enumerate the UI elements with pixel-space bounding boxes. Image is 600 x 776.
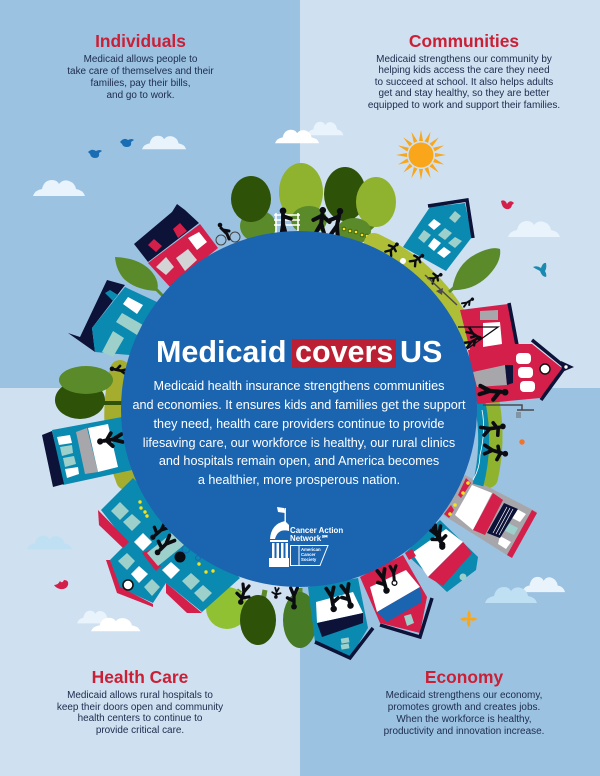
building: teal, left — [42, 417, 132, 487]
body text: they need, health care providers continue to provide — [154, 417, 444, 431]
building: red school, right — [458, 303, 517, 350]
title: Medicaid — [156, 335, 287, 369]
building: tall teal house, upper right — [403, 200, 473, 271]
flowers: park bush — [342, 227, 369, 238]
panel: individuals: take care of themselves and their — [67, 66, 214, 77]
title: covers — [295, 335, 393, 369]
body text: and economies. It ensures kids and families get the support — [132, 398, 466, 412]
logo: Cancer Action Network: Network℠ — [290, 534, 329, 543]
body text: lifesaving care, our workforce is healthy, our rural clinics — [143, 436, 455, 450]
panel: communities: Communities — [409, 31, 519, 51]
panel: economy: Economy — [425, 667, 503, 687]
bushes: olive hedges — [114, 243, 493, 480]
panel: communities: to succeed at school. It also helps adults — [375, 77, 553, 88]
body text — [132, 379, 466, 487]
house: teal with navy roof — [68, 280, 157, 357]
logo: Cancer Action Network: Cancer Action — [290, 526, 343, 535]
central globe — [121, 231, 477, 587]
building: grey with red trim — [443, 475, 537, 558]
pool and basketball hoop — [473, 403, 534, 485]
logo: Cancer Action Network: Society — [301, 557, 317, 562]
trees: top park — [231, 163, 396, 244]
people: silhouettes around the globe — [96, 206, 509, 613]
panel: health care: provide critical care. — [96, 725, 184, 736]
buildings: teal clinic, lower left — [98, 478, 240, 613]
building: red church, right — [468, 340, 574, 404]
house: red with navy roof — [134, 204, 218, 287]
panel: economy — [384, 667, 544, 737]
clouds — [27, 122, 565, 631]
house: teal, bottom — [308, 578, 373, 658]
trees: left pair — [55, 366, 125, 419]
panel: health care: keep their doors open and community — [57, 702, 223, 713]
bench — [274, 213, 300, 233]
panel: individuals — [67, 31, 214, 101]
panel: economy: productivity and innovation increase. — [384, 726, 544, 737]
panel: individuals: and go to work. — [107, 90, 174, 101]
panel: health care: health centers to continue to — [78, 713, 203, 724]
panel: economy: Medicaid strengthens our economy, — [386, 690, 542, 701]
panel: economy: When the workforce is healthy, — [396, 714, 532, 725]
panel: communities: Medicaid strengthens our community by — [376, 54, 552, 65]
body text: Medicaid health insurance strengthens communities — [154, 379, 444, 393]
trees: bottom — [206, 587, 317, 648]
title: US — [400, 335, 442, 369]
logo: Cancer Action Network: American — [301, 547, 321, 552]
panel: health care — [57, 667, 223, 736]
icon: sun — [396, 130, 446, 180]
panel: economy: promotes growth and creates jobs. — [388, 702, 540, 713]
tree: left leaf — [115, 257, 163, 296]
panel: communities: helping kids access the care they need — [378, 65, 550, 76]
panel: individuals: Medicaid allows people to — [84, 54, 198, 65]
panel: health care: Health Care — [92, 667, 189, 687]
panel: health care: Medicaid allows rural hospitals to — [67, 690, 213, 701]
panel: communities — [368, 31, 560, 111]
body text: a healthier, more prosperous nation. — [198, 473, 400, 487]
title — [156, 335, 442, 369]
panel: individuals: Individuals — [95, 31, 186, 51]
panel: communities: get and stay healthy, so they are better — [378, 88, 550, 99]
building: teal with red awning — [405, 520, 478, 592]
icon: birds and butterflies — [54, 139, 546, 627]
tree: right leaf — [449, 248, 500, 292]
panel: communities: equipped to work and support their families. — [368, 100, 560, 111]
house: red, bottom — [360, 555, 432, 637]
panel: individuals: families, pay their bills, — [91, 78, 190, 89]
logo: Cancer Action Network: Cancer — [301, 552, 316, 557]
logo: Cancer Action Network — [269, 507, 343, 567]
body text: and hospitals remain open, and America becomes — [159, 454, 439, 468]
